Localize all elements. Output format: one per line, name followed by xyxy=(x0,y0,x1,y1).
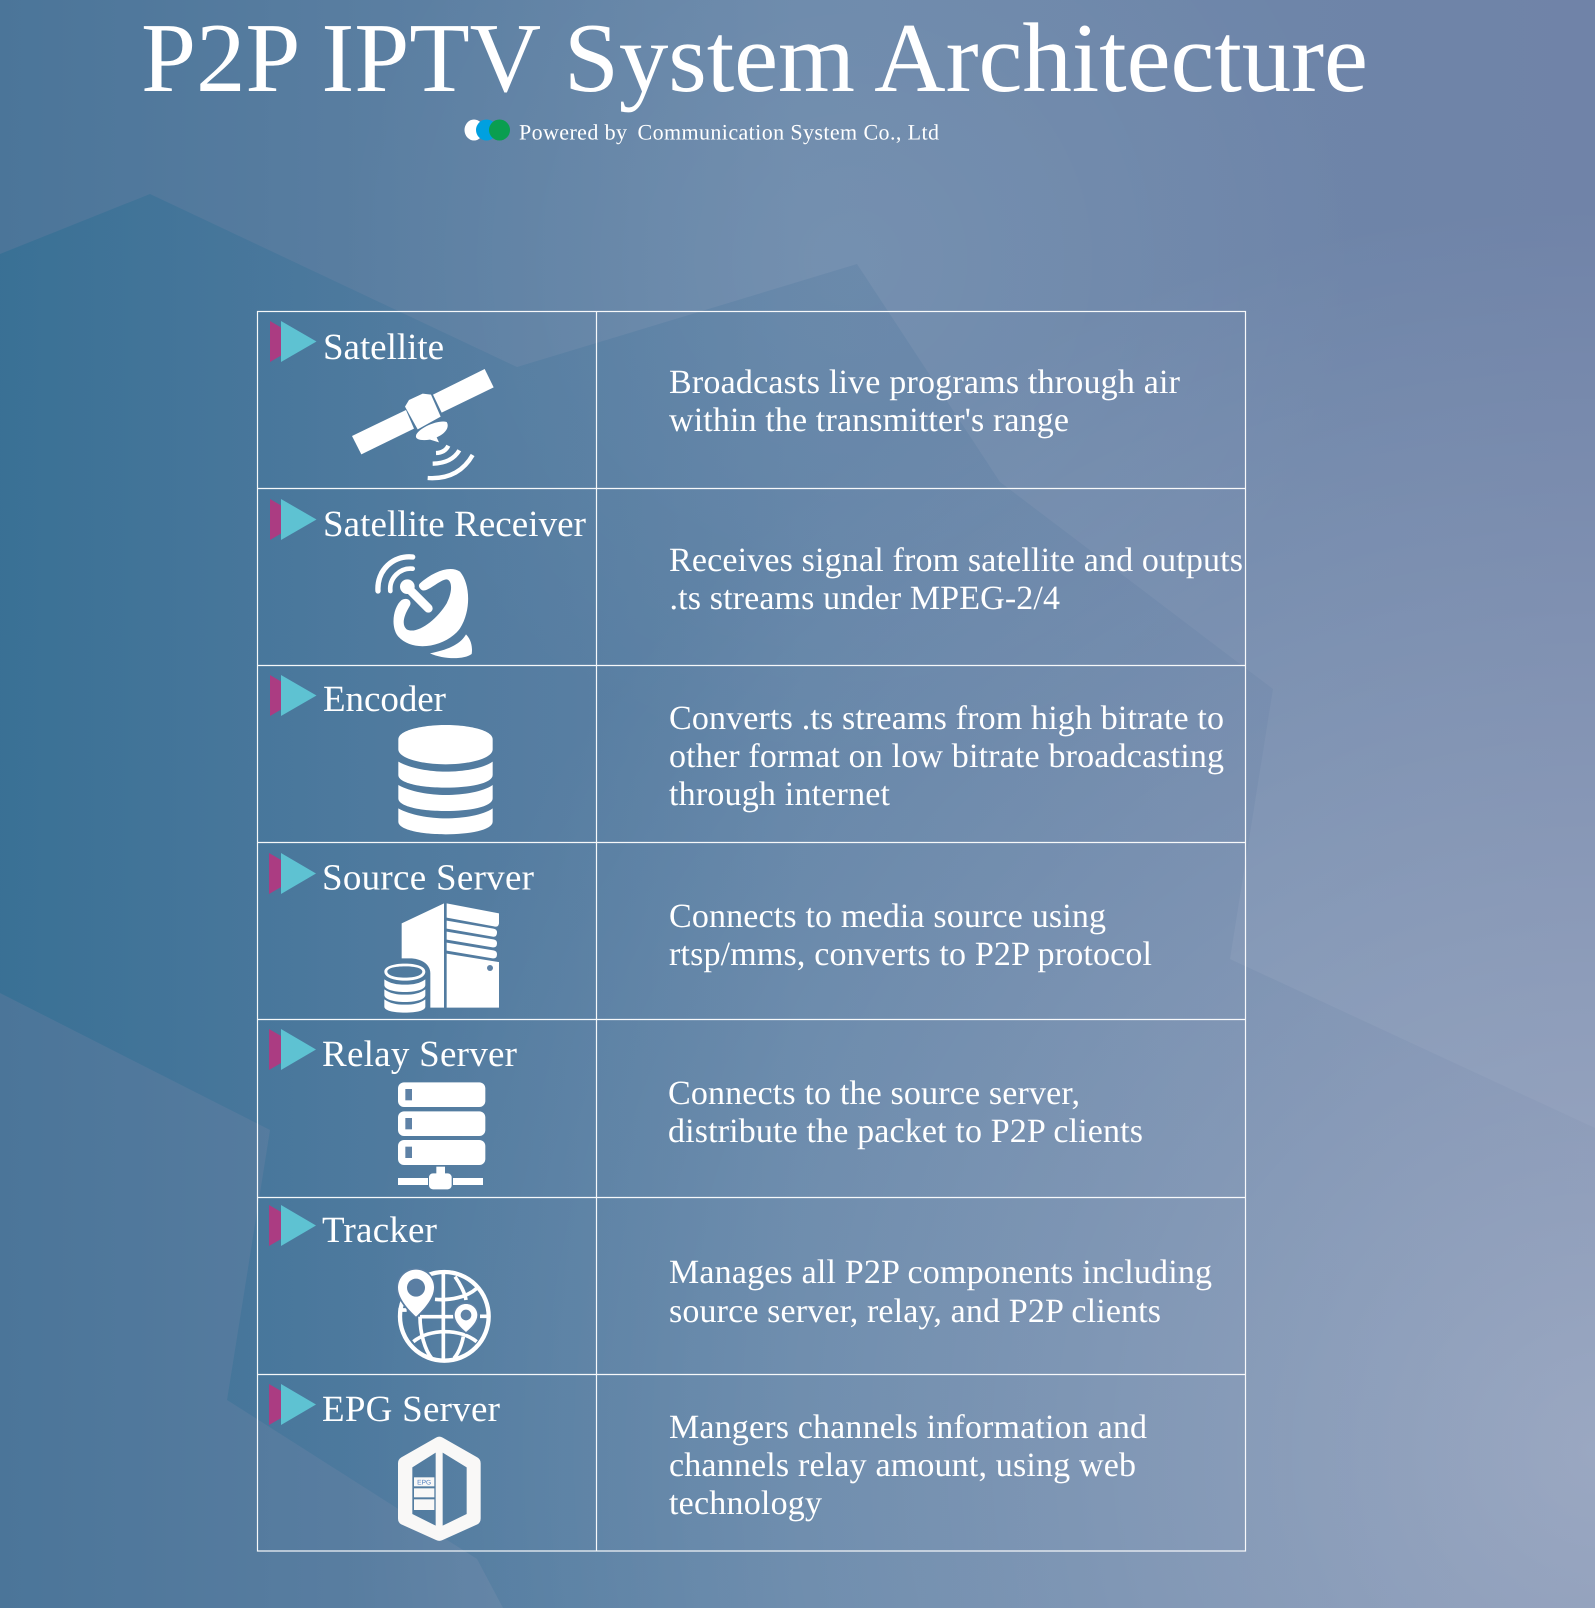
description: Connects to media source using xyxy=(669,898,1106,935)
description: through internet xyxy=(669,776,891,813)
description xyxy=(669,542,1243,617)
description: Manages all P2P components including xyxy=(669,1254,1212,1291)
description xyxy=(669,700,1224,813)
row: Satellite xyxy=(270,321,1181,478)
description: distribute the packet to P2P clients xyxy=(668,1113,1143,1150)
icon: server tower with database xyxy=(384,903,499,1013)
description xyxy=(668,1075,1143,1150)
label: Satellite xyxy=(323,327,444,368)
subtitle: powered by: Powered by xyxy=(519,120,627,144)
icon: EPG box xyxy=(398,1437,481,1541)
icon: satellite dish xyxy=(378,557,472,658)
description: Connects to the source server, xyxy=(668,1075,1080,1112)
description xyxy=(669,364,1181,439)
title: P2P IPTV System Architecture xyxy=(141,4,1368,113)
label: Source Server xyxy=(322,858,534,898)
description: Mangers channels information and xyxy=(669,1409,1147,1446)
label: Encoder xyxy=(323,679,446,720)
row: Encoder xyxy=(270,675,1224,834)
label: Relay Server xyxy=(322,1034,517,1075)
row: Relay Server xyxy=(269,1029,1143,1189)
icon: server rack xyxy=(398,1082,485,1189)
icon: satellite xyxy=(352,369,494,478)
arrow marker xyxy=(270,321,316,362)
description xyxy=(669,898,1152,973)
arrow marker xyxy=(269,1384,316,1425)
description: Converts .ts streams from high bitrate to xyxy=(669,700,1224,737)
description: source server, relay, and P2P clients xyxy=(669,1293,1161,1330)
description: .ts streams under MPEG-2/4 xyxy=(670,580,1060,617)
label: EPG Server xyxy=(322,1389,500,1430)
description: channels relay amount, using web xyxy=(669,1447,1136,1484)
arrow marker xyxy=(270,675,316,716)
description xyxy=(669,1409,1147,1522)
description: rtsp/mms, converts to P2P protocol xyxy=(669,936,1152,973)
label: Satellite Receiver xyxy=(323,504,586,545)
description: Broadcasts live programs through air xyxy=(669,364,1181,401)
icon: EPG box: EPG xyxy=(417,1479,431,1486)
label: Tracker xyxy=(322,1210,437,1251)
icon: company logo circles xyxy=(464,120,510,140)
row: Satellite Receiver xyxy=(270,499,1243,658)
row: EPG Server xyxy=(269,1384,1147,1541)
arrow marker xyxy=(269,853,316,894)
description xyxy=(669,1254,1212,1330)
subtitle: powered by: Communication System Co., Ltd xyxy=(638,120,939,144)
subtitle: powered by xyxy=(464,120,939,144)
arrow marker xyxy=(269,1029,316,1070)
icon: database xyxy=(398,725,493,834)
description: within the transmitter's range xyxy=(669,402,1069,439)
table grid xyxy=(258,311,1246,1551)
icon: globe with location pins xyxy=(398,1270,490,1361)
description: other format on low bitrate broadcasting xyxy=(669,738,1224,775)
arrow marker xyxy=(269,1205,316,1246)
row: Tracker xyxy=(269,1205,1212,1361)
description: technology xyxy=(669,1485,822,1522)
arrow marker xyxy=(270,499,316,540)
description: Receives signal from satellite and outputs xyxy=(669,542,1243,579)
row: Source Server xyxy=(269,853,1152,1013)
